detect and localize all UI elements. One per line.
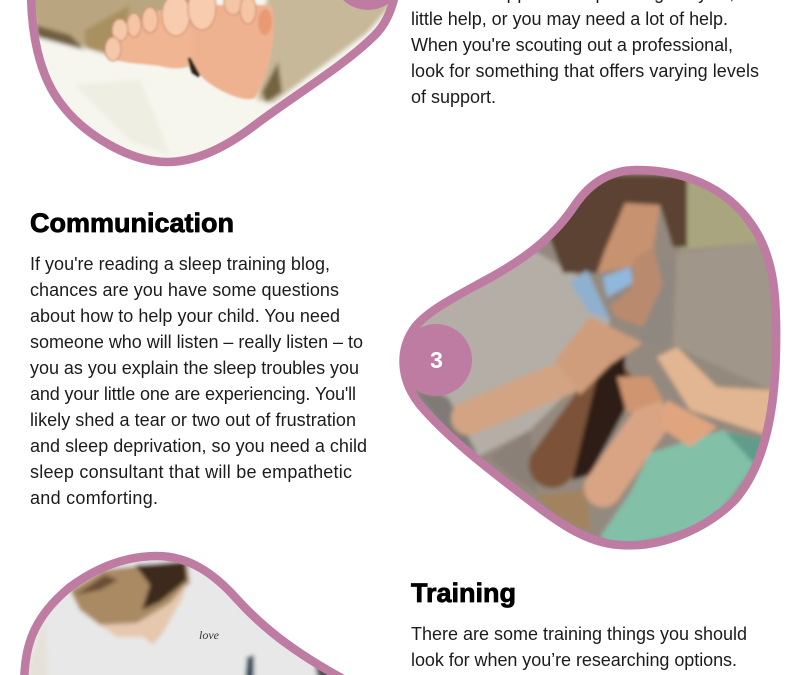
blob outline — [24, 556, 345, 675]
text block: levels of support: of support. — [411, 87, 496, 107]
text block: levels of support — [411, 0, 759, 107]
text block: levels of support: look for something that offers varying levels — [411, 61, 759, 81]
text block: communication: about how to help your child. You need — [30, 306, 340, 326]
heading: Communication: Communication — [30, 208, 234, 238]
text block: communication: and comforting. — [30, 488, 158, 508]
text block: communication — [30, 254, 367, 508]
number badge (cropped) — [332, 0, 404, 10]
number badge 3: 3 — [430, 347, 443, 373]
text block: communication: sleep consultant that will be empathetic — [30, 462, 352, 482]
text block: communication: someone who will listen – really listen – to — [30, 332, 363, 352]
blob outline — [404, 170, 776, 545]
panel: mother on phone with child photo blob — [395, 160, 785, 555]
text block: training: There are some training things you should — [411, 624, 747, 644]
text block: levels of support: When you're scouting out a professional, — [411, 35, 733, 55]
text block: communication: likely shed a tear or two out of frustration — [30, 410, 356, 430]
panel: woman in white sweatshirt photo blob — [15, 550, 355, 675]
text block: communication: and your little one are experiencing. You'll — [30, 384, 356, 404]
text block: communication: you as you explain the sleep troubles you — [30, 358, 359, 378]
text block: communication: chances are you have some questions — [30, 280, 339, 300]
sweatshirt lettering: love — [199, 628, 220, 642]
text block: training: look for when you’re researching options. — [411, 650, 737, 670]
text block: levels of support: little help, or you may need a lot of help. — [411, 9, 728, 29]
text block: communication: If you're reading a sleep training blog, — [30, 254, 330, 274]
blob outline — [31, 0, 396, 162]
text block: training — [411, 624, 747, 670]
panel: baby feet photo blob — [20, 0, 410, 170]
heading: Training: Training — [411, 578, 516, 608]
text block: communication: and sleep deprivation, so you need a child — [30, 436, 367, 456]
number badge 3 — [400, 324, 472, 396]
